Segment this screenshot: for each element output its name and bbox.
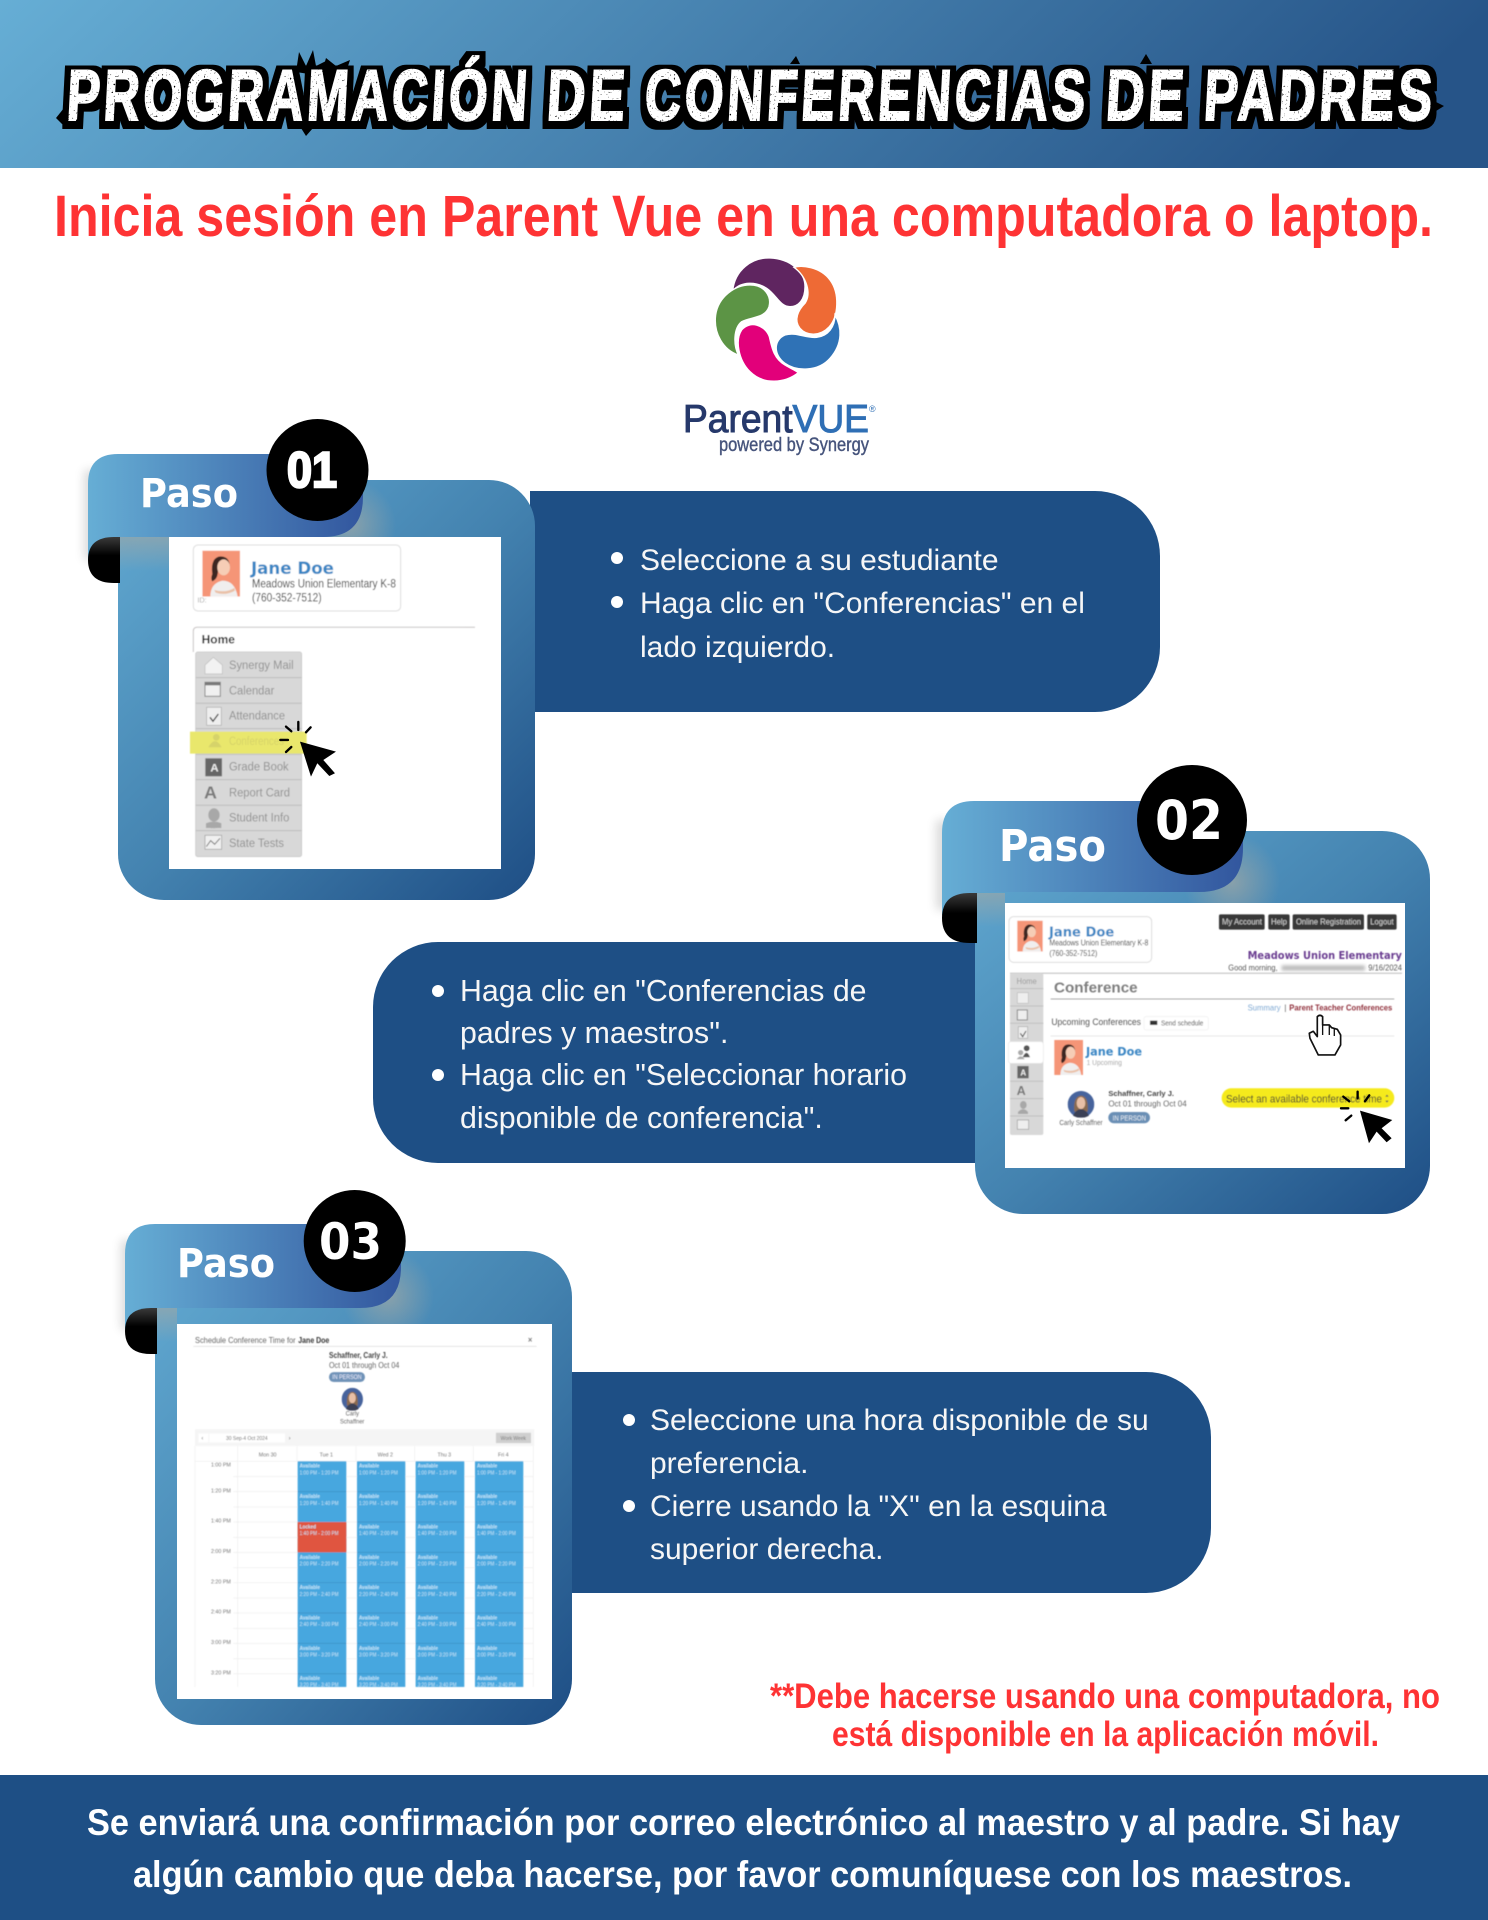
- student card: (760-352-7512): [1049, 948, 1097, 958]
- calendar column: Friday: 3:20 PM - 3:40 PM: [477, 1682, 516, 1689]
- top buttons: Logout: [1370, 917, 1394, 927]
- screenshot: schedule calendar: [177, 1324, 552, 1699]
- page heading: Conference: [1054, 980, 1138, 996]
- calendar toolbar: ‹: [201, 1435, 203, 1442]
- calendar column: Friday: Available: [477, 1555, 498, 1561]
- calendar column: Thursday: Available: [418, 1524, 438, 1530]
- callout: desktop only note: está disponible en la aplicación móvil.: [832, 1715, 1379, 1754]
- calendar time labels: 2:40 PM: [211, 1610, 231, 1616]
- calendar column: Wednesday: [357, 1461, 405, 1689]
- bullet: [432, 985, 444, 997]
- calendar column: Wednesday: Available: [359, 1615, 380, 1622]
- ParentVUE logo: [683, 258, 876, 456]
- text: Haga clic en "Conferencias" en el: [640, 587, 1085, 620]
- panel: step 3 instructions: [565, 1372, 1211, 1593]
- calendar column: Tuesday: Available: [300, 1555, 320, 1561]
- calendar day headers: Thu 3: [437, 1453, 451, 1459]
- calendar column: Friday: Available: [477, 1494, 498, 1500]
- tab: [125, 1224, 401, 1330]
- side menu: Student Info: [229, 811, 290, 825]
- calendar column: Friday: Available: [477, 1464, 498, 1470]
- icon: click cursor: [1341, 1092, 1392, 1143]
- calendar time labels: 2:00 PM: [211, 1549, 231, 1555]
- panel: step 2 card: [936, 765, 1430, 1214]
- dialog title: [195, 1335, 533, 1345]
- footer text: [87, 1802, 1400, 1895]
- calendar column: Tuesday: [298, 1461, 346, 1689]
- side menu: Synergy Mail: [229, 658, 294, 672]
- tab: [88, 454, 363, 560]
- calendar column: Thursday: 2:40 PM - 3:00 PM: [418, 1622, 456, 1628]
- calendar column: Tuesday: Available: [300, 1464, 320, 1470]
- calendar column: Tuesday: Available: [300, 1585, 320, 1591]
- sub navigation: |: [1284, 1002, 1286, 1012]
- student card: Jane Doe: [1048, 926, 1114, 941]
- calendar column: Wednesday: Available: [359, 1676, 380, 1682]
- calendar column: Wednesday: Available: [359, 1646, 380, 1652]
- sub navigation: Summary: [1248, 1002, 1281, 1012]
- teacher row: [1059, 1089, 1187, 1127]
- calendar column: Friday: Available: [477, 1615, 498, 1622]
- text: Cierre usando la "X" en la esquina: [650, 1490, 1107, 1523]
- tab fold: [125, 1308, 157, 1354]
- calendar column: Friday: 3:00 PM - 3:20 PM: [477, 1652, 516, 1659]
- calendar column: Wednesday: 2:40 PM - 3:00 PM: [359, 1622, 398, 1628]
- calendar column: Friday: Available: [477, 1646, 498, 1652]
- student card: ID:: [197, 595, 207, 604]
- label: Paso: [999, 821, 1106, 872]
- panel: step 2 instructions: [373, 942, 985, 1163]
- side navigation: Home: [1017, 977, 1037, 986]
- calendar column: Friday: 1:20 PM - 1:40 PM: [477, 1501, 516, 1507]
- button: select time: Select an available conference time: [1226, 1093, 1382, 1105]
- calendar toolbar: 30 Sep-4 Oct 2024: [226, 1436, 268, 1442]
- callout: desktop only note: [770, 1677, 1440, 1754]
- calendar column: Thursday: 3:00 PM - 3:20 PM: [418, 1652, 456, 1659]
- calendar column: Thursday: Available: [418, 1646, 438, 1652]
- calendar column: Tuesday: 3:20 PM - 3:40 PM: [300, 1682, 339, 1689]
- calendar column: Thursday: 3:20 PM - 3:40 PM: [418, 1682, 456, 1689]
- sub navigation: Parent Teacher Conferences: [1289, 1002, 1393, 1012]
- number badge: 03: [319, 1213, 382, 1271]
- greeting: 9/16/2024: [1368, 963, 1402, 973]
- teacher details: Oct 01 through Oct 04: [329, 1361, 400, 1370]
- top buttons: [1219, 914, 1397, 930]
- calendar toolbar: ›: [289, 1435, 291, 1442]
- highlight: conferences: [190, 732, 307, 754]
- calendar time labels: 3:00 PM: [211, 1640, 231, 1646]
- panel: step 1 instructions: [530, 491, 1160, 712]
- calendar time labels: 1:40 PM: [211, 1519, 231, 1525]
- side menu: Grade Book: [229, 760, 290, 774]
- dialog title: ×: [528, 1335, 533, 1345]
- header band: [0, 0, 1488, 168]
- calendar time labels: 1:20 PM: [211, 1488, 231, 1494]
- calendar day headers: Mon 30: [259, 1453, 277, 1459]
- upcoming row: Send schedule: [1161, 1019, 1203, 1028]
- calendar column: Wednesday: 3:20 PM - 3:40 PM: [359, 1682, 398, 1689]
- label: Paso: [140, 471, 238, 517]
- calendar column: Wednesday: 3:00 PM - 3:20 PM: [359, 1652, 398, 1659]
- title: DE: [1104, 56, 1190, 136]
- screenshot: student menu: [169, 537, 501, 869]
- student card: [1009, 917, 1152, 962]
- student row: 1 Upcoming: [1087, 1060, 1122, 1067]
- calendar column: Wednesday: Available: [359, 1464, 380, 1470]
- icon: hand cursor: [1309, 1015, 1341, 1055]
- top buttons: Help: [1271, 917, 1287, 927]
- calendar column: Thursday: Available: [418, 1676, 438, 1682]
- calendar column: Wednesday: Available: [359, 1555, 380, 1561]
- button: select time: [1222, 1088, 1394, 1108]
- bullet: [623, 1414, 635, 1426]
- title: DE: [545, 56, 631, 136]
- side menu: Calendar: [229, 683, 274, 697]
- calendar column: Tuesday: 1:40 PM - 2:00 PM: [300, 1531, 339, 1537]
- calendar column: Thursday: Available: [418, 1555, 438, 1561]
- logo symbol: [715, 258, 840, 381]
- title: CONFERENCIAS: [643, 56, 1091, 136]
- menu icons: [204, 657, 222, 849]
- calendar column: Tuesday: Available: [300, 1676, 320, 1682]
- side menu: Report Card: [229, 785, 290, 799]
- registered mark: ®: [869, 404, 876, 414]
- calendar time labels: 2:20 PM: [211, 1579, 231, 1585]
- calendar column: Friday: Available: [477, 1676, 498, 1682]
- text: lado izquierdo.: [640, 631, 835, 664]
- calendar column: Tuesday: 1:20 PM - 1:40 PM: [300, 1501, 339, 1507]
- side navigation: A: [1020, 1069, 1026, 1078]
- calendar column: Tuesday: Available: [300, 1646, 320, 1652]
- calendar column: Thursday: 1:20 PM - 1:40 PM: [418, 1501, 456, 1507]
- tab fold: [88, 537, 120, 583]
- greeting: Good morning,: [1228, 963, 1278, 973]
- calendar column: Wednesday: Available: [359, 1494, 380, 1500]
- calendar toolbar: Work Week: [501, 1436, 526, 1442]
- calendar toolbar: [195, 1429, 534, 1446]
- calendar column: Wednesday: Available: [359, 1524, 380, 1530]
- calendar column: Friday: 1:00 PM - 1:20 PM: [477, 1470, 516, 1477]
- teacher details: Schaffner: [340, 1418, 364, 1426]
- calendar column: Tuesday: 2:40 PM - 3:00 PM: [300, 1622, 339, 1628]
- menu icons: A: [210, 762, 219, 774]
- label: Paso: [177, 1241, 275, 1287]
- panel: step 3 card: [121, 1190, 572, 1725]
- text: disponible de conferencia".: [460, 1102, 823, 1135]
- number badge: 01: [287, 442, 337, 498]
- calendar day headers: [259, 1453, 509, 1459]
- menu icons: A: [204, 783, 217, 803]
- calendar column: Thursday: Available: [418, 1585, 438, 1591]
- teacher row: Carly Schaffner: [1059, 1118, 1103, 1127]
- calendar column: Tuesday: 2:00 PM - 2:20 PM: [300, 1561, 339, 1568]
- home tab: [193, 627, 475, 652]
- calendar column: Tuesday: Locked: [300, 1524, 316, 1530]
- top buttons: My Account: [1222, 917, 1263, 927]
- text: Seleccione una hora disponible de su: [650, 1404, 1149, 1437]
- text: Haga clic en "Seleccionar horario: [460, 1059, 907, 1092]
- calendar time labels: 3:20 PM: [211, 1670, 231, 1677]
- bullet: [611, 552, 623, 564]
- calendar column: Friday: 1:40 PM - 2:00 PM: [477, 1531, 516, 1537]
- calendar column: Thursday: [416, 1461, 464, 1689]
- calendar column: Thursday: 2:20 PM - 2:40 PM: [418, 1592, 456, 1598]
- number badge: [1137, 765, 1247, 875]
- logo wordmark: ParentVUE: [683, 398, 869, 441]
- calendar column: Wednesday: 1:00 PM - 1:20 PM: [359, 1470, 398, 1477]
- calendar column: Tuesday: 2:20 PM - 2:40 PM: [300, 1592, 339, 1598]
- calendar column: Friday: Available: [477, 1524, 498, 1530]
- student card: Meadows Union Elementary K-8: [252, 576, 396, 590]
- calendar column: Tuesday: Available: [300, 1615, 320, 1622]
- text: preferencia.: [650, 1447, 808, 1480]
- bullet: [432, 1069, 444, 1081]
- text: superior derecha.: [650, 1533, 883, 1566]
- number badge: [304, 1190, 406, 1292]
- calendar column: Thursday: Available: [418, 1464, 438, 1470]
- teacher details: IN PERSON: [332, 1374, 362, 1381]
- student card: Meadows Union Elementary K-8: [1049, 938, 1149, 948]
- calendar column: Thursday: Available: [418, 1494, 438, 1500]
- footer: [0, 1775, 1488, 1920]
- calendar column: Wednesday: 1:20 PM - 1:40 PM: [359, 1501, 398, 1507]
- side navigation: A: [1017, 1084, 1026, 1098]
- student card: (760-352-7512): [252, 591, 322, 605]
- logo tagline: powered by Synergy: [719, 435, 869, 456]
- sub navigation: [1248, 1002, 1393, 1012]
- calendar column: Wednesday: Available: [359, 1585, 380, 1591]
- side menu: [196, 652, 302, 857]
- calendar column: Wednesday: 2:20 PM - 2:40 PM: [359, 1592, 398, 1598]
- bullet: [611, 596, 623, 608]
- footer text: Se enviará una confirmación por correo electrónico al maestro y al padre. Si hay: [87, 1802, 1400, 1843]
- number badge: 02: [1155, 789, 1223, 852]
- calendar column: Thursday: 1:00 PM - 1:20 PM: [418, 1470, 456, 1477]
- calendar column: Friday: 2:40 PM - 3:00 PM: [477, 1622, 516, 1628]
- side menu: State Tests: [229, 836, 284, 850]
- home tab: Home: [202, 633, 236, 646]
- calendar column: Thursday: 2:00 PM - 2:20 PM: [418, 1561, 456, 1568]
- side menu: Attendance: [229, 709, 285, 723]
- upcoming row: [1051, 1017, 1208, 1030]
- calendar column: Thursday: Available: [418, 1615, 438, 1622]
- calendar column: Wednesday: 2:00 PM - 2:20 PM: [359, 1561, 398, 1568]
- calendar column: Wednesday: 1:40 PM - 2:00 PM: [359, 1531, 398, 1537]
- calendar column: Friday: 2:00 PM - 2:20 PM: [477, 1561, 516, 1568]
- calendar day headers: Tue 1: [320, 1453, 333, 1459]
- student row: [1054, 1040, 1142, 1075]
- dialog title: Jane Doe: [298, 1336, 330, 1345]
- footer text: algún cambio que deba hacerse, por favor comuníquese con los maestros.: [133, 1854, 1352, 1895]
- title: [56, 50, 1444, 136]
- calendar day headers: Wed 2: [378, 1453, 393, 1459]
- school name: Meadows Union Elementary: [1248, 949, 1402, 962]
- calendar column: Friday: [475, 1461, 523, 1689]
- bullet: [623, 1500, 635, 1512]
- calendar time labels: [211, 1463, 231, 1677]
- tab fold: [942, 893, 977, 943]
- text: padres y maestros".: [460, 1017, 728, 1050]
- top buttons: Online Registration: [1296, 917, 1361, 927]
- calendar day headers: Fri 4: [498, 1453, 509, 1459]
- teacher details: [329, 1351, 400, 1426]
- highlight: conferences: Conferences: [229, 734, 284, 748]
- teacher details: Schaffner, Carly J.: [329, 1351, 388, 1360]
- text: Seleccione a su estudiante: [640, 544, 999, 577]
- teacher row: IN PERSON: [1113, 1113, 1146, 1122]
- calendar time labels: 1:00 PM: [211, 1463, 231, 1469]
- calendar column: Tuesday: 1:00 PM - 1:20 PM: [300, 1470, 339, 1477]
- panel: step 1 card: [84, 419, 535, 900]
- calendar column: Friday: 2:20 PM - 2:40 PM: [477, 1592, 516, 1598]
- calendar column: Tuesday: 3:00 PM - 3:20 PM: [300, 1652, 339, 1659]
- calendar column: Thursday: 1:40 PM - 2:00 PM: [418, 1531, 456, 1537]
- calendar column: Tuesday: Available: [300, 1494, 320, 1500]
- student card: [193, 545, 401, 611]
- greeting: [1228, 963, 1402, 973]
- dialog title: Schedule Conference Time for: [195, 1336, 296, 1345]
- screenshot: conference page: [1005, 903, 1405, 1168]
- number badge: [266, 419, 368, 521]
- icon: click cursor: [280, 722, 336, 777]
- text: Haga clic en "Conferencias de: [460, 975, 867, 1008]
- student card: Jane Doe: [250, 559, 334, 578]
- teacher row: Schaffner, Carly J.: [1108, 1089, 1174, 1098]
- side navigation: [1008, 973, 1043, 1135]
- tab: [942, 801, 1243, 915]
- teacher row: Oct 01 through Oct 04: [1108, 1099, 1187, 1109]
- calendar column: Friday: Available: [477, 1585, 498, 1591]
- upcoming row: Upcoming Conferences: [1051, 1017, 1141, 1027]
- teacher details: Carly: [346, 1410, 360, 1418]
- title: PROGRAMACIÓN: [65, 55, 533, 136]
- student row: Jane Doe: [1085, 1045, 1142, 1059]
